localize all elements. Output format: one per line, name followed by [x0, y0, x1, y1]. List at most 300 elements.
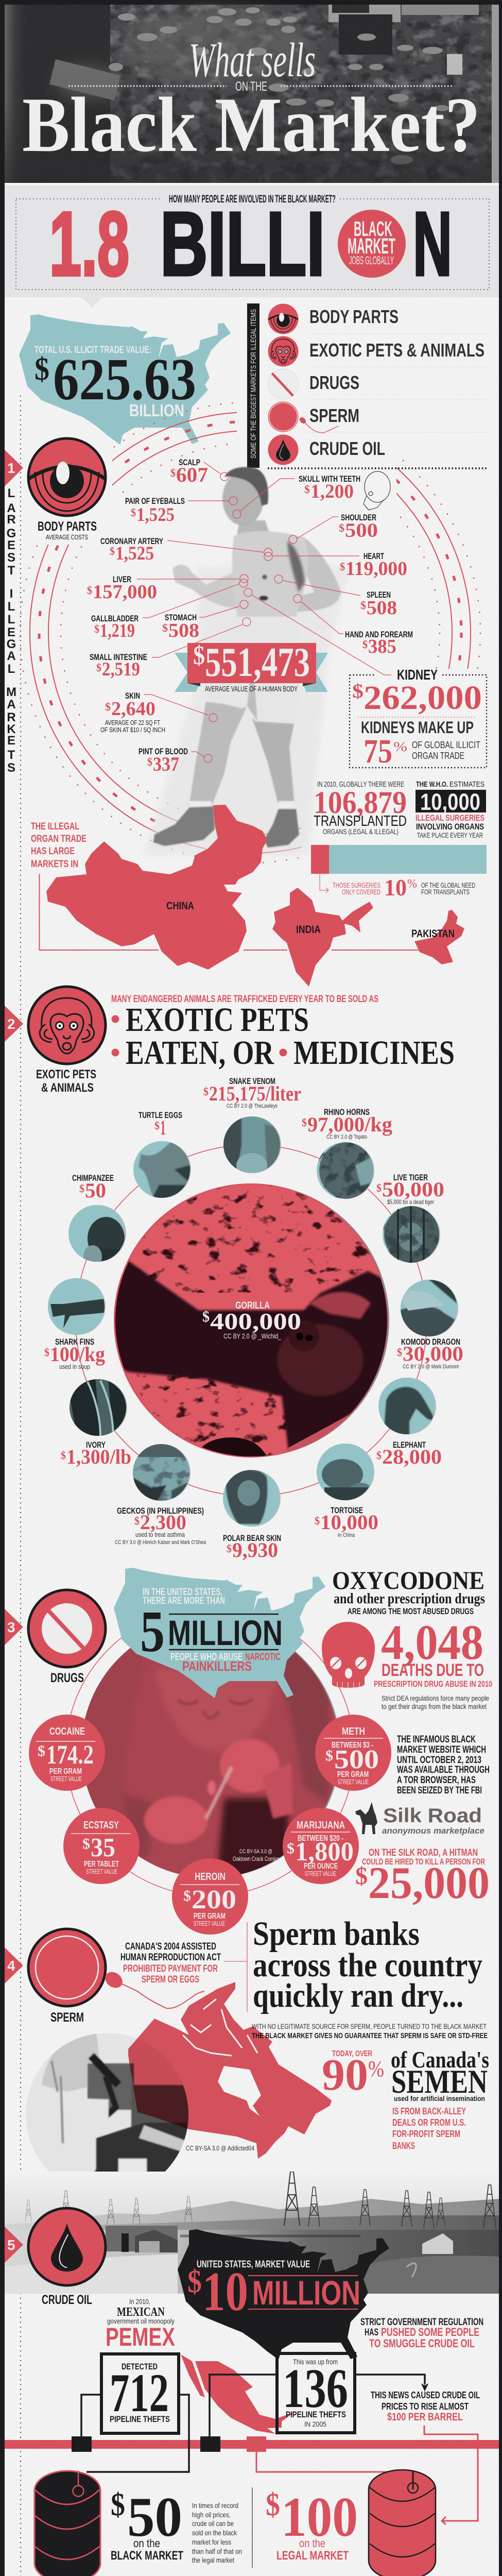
US map: total illicit trade: BILLION: [129, 401, 184, 420]
drug price circle: ecstasy: $: [82, 1836, 90, 1852]
section 5 tag: 5: [7, 2237, 15, 2253]
label: drugs: DRUGS: [309, 372, 359, 393]
drug price circle: meth: $: [325, 1748, 333, 1764]
label: live tiger: [376, 1173, 444, 1206]
red circle callout: MARKET: [348, 234, 395, 259]
price: scalp: 607: [176, 463, 208, 486]
section 3 tag: 3: [7, 1619, 15, 1635]
price: shoulder: [339, 513, 378, 541]
icon: camel: [355, 1802, 377, 1834]
box: 136 pipeline thefts: PIPELINE THEFTS: [286, 2410, 346, 2419]
section 2 tag: 2: [7, 1016, 15, 1032]
photo circle: gorilla: $: [202, 1308, 210, 1325]
price: pair of eyeballs: $: [131, 506, 136, 519]
stat: ten percent: ONLY COVERED: [342, 888, 380, 896]
label: tortoise: 10,000: [320, 1511, 378, 1534]
label: snake venom: 215,175/liter: [209, 1082, 301, 1105]
red circle callout: [338, 210, 406, 278]
label: rhino horns: CC BY 2.0 @ Topato: [326, 1134, 367, 1140]
label: live tiger: $5,000 for a dead tiger: [387, 1198, 434, 1206]
label: sperm: SPERM: [309, 405, 359, 426]
concentric arcs around the body: [20, 402, 480, 863]
text block: price rise: PRICES TO RISE ALMOST: [382, 2401, 469, 2412]
drug price circle: meth: BETWEEN $3 -: [332, 1741, 373, 1750]
price: stomach: [162, 613, 199, 641]
price: scalp: SCALP: [179, 457, 200, 467]
label: live tiger: 50,000: [382, 1178, 444, 1201]
price: skin: $: [105, 700, 111, 713]
price: liver: [87, 574, 157, 603]
price: shoulder: $: [339, 521, 344, 534]
number 1.8: 1.8: [49, 194, 129, 295]
stat: 90 percent of Canada's semen: FOR-PROFIT SPERM: [392, 2129, 460, 2139]
label: turtle eggs: [139, 1110, 182, 1139]
photo circle: elephant: [378, 1378, 437, 1437]
caption: microscope credit: CC BY-SA 3.0 @ Addicted04: [186, 2144, 254, 2152]
text block: Pemex: [106, 2297, 175, 2351]
box: 712 pipeline thefts: PIPELINE THEFTS: [110, 2414, 170, 2424]
text block: Canada's act: HUMAN REPRODUCTION ACT: [120, 1952, 221, 1963]
price: pair of eyeballs: 1,525: [136, 504, 175, 526]
price: coronary artery: CORONARY ARTERY: [100, 536, 163, 546]
stat: illegal surgeries: INVOLVING ORGANS: [416, 822, 484, 832]
vertical label bar: [247, 303, 259, 468]
price: pair of eyeballs: [125, 496, 185, 526]
stat: transplanted organs: TRANSPLANTED: [314, 813, 407, 829]
banner: average value of a human body: AVERAGE VALUE OF A HUMAN BODY: [205, 685, 298, 693]
heading: endangered animals: MEDICINES: [293, 1034, 455, 1072]
bar chart: share of global need: [311, 845, 487, 893]
label: geckos: 2,300: [140, 1511, 186, 1534]
drug price circle: ecstasy: STREET VALUE: [86, 1868, 117, 1875]
price: small intestine: 2,519: [102, 659, 140, 680]
price: 100 on the legal market: [266, 2486, 358, 2563]
price: spleen: [360, 590, 397, 619]
price: 100 on the legal market: $: [266, 2487, 280, 2522]
price: pint of blood: [139, 747, 188, 775]
price: liver: LIVER: [113, 574, 131, 584]
divider lines: sperm banks: [224, 1922, 247, 2012]
stat: 4,048 deaths: [374, 1615, 492, 1710]
photo circle: shark: [48, 1278, 106, 1335]
text block: Canada's act: PROHIBITED PAYMENT FOR: [123, 1963, 218, 1974]
label: komodo dragon: $: [397, 1346, 402, 1359]
barrel: black market: [34, 2471, 100, 2576]
label: geckos: $: [134, 1514, 140, 1527]
drug price circle: cocaine: $: [38, 1743, 45, 1759]
stat: 90 percent of Canada's semen: BANKS: [392, 2141, 415, 2151]
label: komodo dragon: CC BY 2.0 @ Mark Dumont: [403, 1364, 459, 1370]
label: ivory: $: [61, 1449, 66, 1462]
stat: 4,048 deaths: 4,048: [381, 1615, 483, 1670]
drug price circle: marijuana: 1,800: [295, 1837, 354, 1867]
drug price circle: cocaine: COCAINE: [49, 1726, 85, 1737]
price: pint of blood: PINT OF BLOOD: [139, 747, 188, 756]
US map: market value 10 million: [178, 2229, 389, 2360]
price: heart: 119,000: [345, 558, 407, 580]
heading: exotic pets and animals: [36, 1067, 96, 1095]
box: 712 pipeline thefts: [101, 2354, 179, 2433]
US map: 5 million painkiller abusers: 5: [140, 1599, 165, 1664]
label: polar bear skin: 9,930: [232, 1538, 278, 1562]
label: shark fins: used in soup: [59, 1363, 90, 1370]
text block: Pemex: government oil monopoly: [107, 2317, 175, 2325]
label: shark fins: 100/kg: [50, 1343, 105, 1366]
label: rhino horns: 97,000/kg: [307, 1113, 392, 1136]
box: 136 pipeline thefts: [277, 2353, 355, 2433]
callout: kidney: [350, 667, 487, 770]
label: turtle eggs: 1: [160, 1116, 166, 1139]
price: 50 on the black market: 50: [127, 2486, 182, 2548]
photo circle: chimpanzee: [68, 1205, 126, 1262]
heading: exotic pets and animals: EXOTIC PETS: [36, 1067, 96, 1081]
red circle callout: BLACK: [354, 217, 392, 241]
US map: total illicit trade: TOTAL U.S. ILLICIT TRADE VALUE:: [34, 345, 151, 355]
stat: illegal surgeries: THE W.H.O.: [416, 780, 448, 789]
price: 50 on the black market: $: [111, 2487, 125, 2522]
stat: transplanted organs: ORGANS (LEGAL & ILLEGAL): [323, 827, 399, 836]
photo circle: komodo dragon: [401, 1280, 458, 1336]
banner: average value of a human body: $: [193, 641, 205, 670]
price: gallbladder: 1,219: [100, 620, 135, 641]
label: rhino horns: $: [302, 1116, 307, 1129]
photo: oil field: [5, 2172, 499, 2294]
callout: kidney: $: [352, 681, 363, 702]
price: coronary artery: [100, 536, 163, 564]
icon: eye: [268, 304, 299, 334]
price: small intestine: $: [96, 661, 101, 674]
label: komodo dragon: KOMODO DRAGON: [401, 1337, 460, 1347]
price: heart: [340, 551, 407, 580]
photo circle: gecko: [133, 1444, 191, 1501]
label: geckos: [115, 1506, 206, 1546]
label: live tiger: LIVE TIGER: [393, 1173, 428, 1182]
text: illegal organ trade markets: [31, 821, 86, 870]
heading: drugs: DRUGS: [50, 1671, 84, 1685]
drug price circle: cocaine: 174.2: [46, 1740, 94, 1770]
drug price circle: heroin: [172, 1858, 248, 1935]
price: skin: [100, 691, 165, 734]
human figure photo: [144, 467, 350, 855]
drug price circle: ecstasy: PER TABLET: [84, 1860, 119, 1869]
price: liver: 157,000: [93, 581, 157, 603]
stat: ten percent: 10: [384, 874, 407, 901]
section 1 tag: [5, 450, 23, 486]
price: skin: AVERAGE OF 22 SQ FT: [105, 719, 160, 726]
drug price circle: ecstasy: ECSTASY: [83, 1820, 119, 1831]
title: [22, 33, 480, 168]
price: hand and forearm: [345, 630, 413, 657]
barrel: legal market: [369, 2470, 436, 2576]
callout: kidney: %: [393, 739, 407, 754]
drug price circle: heroin: 200: [192, 1885, 236, 1914]
text block: strict regulation: [360, 2317, 483, 2350]
box: 712 pipeline thefts: 712: [110, 2363, 169, 2423]
text block: infamous website: [397, 1734, 490, 1796]
label: komodo dragon: 30,000: [403, 1342, 463, 1365]
photo circle: ivory: [70, 1379, 127, 1436]
price: hand and forearm: 385: [368, 636, 396, 657]
label: chimpanzee: CHIMPANZEE: [72, 1173, 114, 1183]
label: geckos: GECKOS (IN PHILLIPPINES): [117, 1506, 204, 1516]
section 5 tag: [5, 2227, 23, 2263]
photo circle: snake venom: [223, 1116, 281, 1173]
drug price circle: heroin: $: [183, 1888, 191, 1904]
price: pint of blood: $: [147, 755, 152, 768]
label: polar bear skin: POLAR BEAR SKIN: [223, 1533, 281, 1543]
label: snake venom: [203, 1076, 301, 1109]
map: Mexico: [181, 2354, 295, 2434]
drug price circle: marijuana: MARIJUANA: [297, 1820, 345, 1831]
price: stomach: STOMACH: [165, 613, 197, 622]
price: stomach: 508: [168, 620, 199, 641]
icon: skull outline: [363, 471, 390, 510]
big icon: body parts eye: [28, 438, 106, 516]
label: polar bear skin: $: [227, 1542, 232, 1555]
label: geckos: CC BY 3.0 @ Hinrich Kaiser and Mark O'Shea: [115, 1539, 206, 1546]
big icon: sperm: [28, 1929, 204, 2008]
photo circle: turtle: [133, 1141, 193, 1200]
text block: oxycodone: [332, 1566, 485, 1616]
label: komodo dragon: [397, 1337, 463, 1370]
drug price circle: ecstasy: [63, 1808, 140, 1884]
price: shoulder: 500: [345, 519, 378, 541]
headline: sperm banks: quickly ran dry...: [253, 1977, 463, 2014]
price: heart: HEART: [363, 551, 384, 561]
photo circle: tortoise: [317, 1444, 374, 1503]
label: snake venom: $: [203, 1085, 209, 1098]
photo circle: scientist at microscope: [26, 2032, 193, 2197]
photo circle: person smoking: Oaktown Crack Comics: [233, 1855, 280, 1862]
stat: transplanted organs: [314, 780, 407, 836]
label: live tiger: $: [376, 1181, 382, 1194]
price: skull with teeth: $: [304, 483, 310, 496]
title rule left: [68, 86, 227, 87]
callout: kidney: 75: [363, 733, 392, 770]
headline: sperm banks: [252, 1915, 488, 2040]
label: turtle eggs: $: [154, 1119, 160, 1132]
sub heading: average costs: AVERAGE COSTS: [46, 533, 88, 541]
map: Pakistan: PAKISTAN: [411, 928, 455, 940]
label: rhino horns: RHINO HORNS: [324, 1107, 370, 1117]
stat: 90 percent of Canada's semen: TODAY, OVER: [332, 2049, 372, 2058]
price: 100 on the legal market: on the: [299, 2537, 325, 2550]
drug price circle: heroin: HEROIN: [195, 1871, 226, 1883]
label: shark fins: [44, 1337, 105, 1370]
label: ivory: 1,300/lb: [66, 1445, 131, 1468]
price: 100 on the legal market: LEGAL MARKET: [276, 2549, 349, 2563]
letter N: N: [413, 194, 452, 295]
text: illegal organ trade markets: ORGAN TRADE: [31, 834, 86, 844]
label: geckos: used to treat asthma: [135, 1531, 185, 1538]
vertical dotted spine: [21, 396, 487, 2576]
US map: 5 million painkiller abusers: PAINKILLERS: [182, 1658, 252, 1674]
price: heart: $: [340, 560, 345, 573]
map: China: CHINA: [166, 900, 194, 912]
photo circle: person smoking: [81, 1618, 340, 1880]
drug price circle: ecstasy: 35: [91, 1833, 115, 1862]
text block: Canada's act: CANADA'S 2004 ASSISTED: [125, 1941, 216, 1952]
text block: record high oil prices: market for less: [192, 2538, 231, 2546]
US map: 5 million painkiller abusers: NARCOTIC: [245, 1652, 281, 1663]
section 2 tag: [5, 1006, 23, 1042]
map: Canada: [128, 1982, 332, 2159]
text block: Pemex: In 2010,: [129, 2297, 150, 2306]
photo circle: gorilla: 400,000: [210, 1308, 301, 1334]
price: gallbladder: $: [94, 622, 99, 635]
price: 50 on the black market: BLACK MARKET: [111, 2549, 183, 2563]
box: 136 pipeline thefts: IN 2005: [304, 2420, 326, 2428]
drug price circle: cocaine: STREET VALUE: [50, 1775, 82, 1783]
divider between markets: [252, 2487, 253, 2568]
text block: Pemex: MEXICAN: [117, 2306, 165, 2319]
drug price circle: heroin: STREET VALUE: [194, 1920, 225, 1927]
big icon: oil drop: [28, 2208, 106, 2285]
drug price circle: meth: PER GRAM: [337, 1770, 369, 1779]
heading: endangered animals: [111, 994, 455, 1072]
text block: record high oil prices: sold on the black: [192, 2529, 237, 2537]
icon: oil drop: [268, 435, 299, 465]
drug price circle: meth: [315, 1715, 391, 1791]
label: body parts: BODY PARTS: [309, 306, 399, 327]
section 4 tag: 4: [7, 1958, 15, 1974]
stat: ten percent: OF THE GLOBAL NEED: [421, 881, 475, 889]
text block: strict regulation: HAS: [365, 2327, 378, 2338]
price: liver: $: [87, 584, 92, 597]
stat: hitman price: 25,000: [368, 1858, 490, 1908]
US map: market value 10 million: $: [187, 2264, 202, 2299]
stat: hitman price: $: [355, 1862, 368, 1890]
stat: 90 percent of Canada's semen: %: [368, 2056, 384, 2081]
price: 50 on the black market: on the: [133, 2537, 160, 2550]
price: spleen: 508: [367, 597, 397, 619]
label: snake venom: SNAKE VENOM: [229, 1076, 275, 1086]
stat: illegal surgeries: ESTIMATES: [449, 780, 484, 789]
stat: 90 percent of Canada's semen: IS FROM BACK-ALLEY: [392, 2106, 466, 2116]
price: skull with teeth: 1,200: [310, 481, 354, 502]
price: pair of eyeballs: PAIR OF EYEBALLS: [125, 496, 185, 506]
heading: endangered animals: EATEN, OR: [126, 1034, 274, 1072]
big icon: no drugs: [28, 1590, 106, 1667]
photo circle: gorilla: GORILLA: [235, 1300, 270, 1311]
label: snake venom: CC BY 2.0 @ TheLawleys: [227, 1103, 278, 1109]
text block: record high oil prices: In times of record: [192, 2501, 238, 2510]
photo circle: gorilla: CC BY 2.0 @ _Wichid_: [223, 1332, 281, 1340]
map: China: [46, 805, 267, 970]
label: tortoise: TORTOISE: [331, 1505, 363, 1515]
text: illegal organ trade markets: HAS LARGE: [31, 846, 75, 857]
price: small intestine: [90, 652, 147, 680]
price: hand and forearm: $: [362, 638, 368, 651]
banner: average value of a human body: 551,473: [205, 640, 310, 685]
heading: endangered animals: MANY ENDANGERED ANIMALS ARE TRAFFICKED EVERY YEAR TO BE SOLD AS: [111, 994, 378, 1005]
label: polar bear skin: [223, 1533, 281, 1562]
stat: ten percent: FOR TRANSPLANTS: [421, 888, 470, 896]
stat: transplanted organs: 106,879: [314, 786, 407, 820]
label: shark fins: $: [44, 1346, 49, 1359]
section 3 tag: [5, 1609, 23, 1645]
text block: price rise: [371, 2390, 480, 2423]
price: skull with teeth: SKULL WITH TEETH: [299, 474, 360, 484]
price: scalp: [170, 457, 208, 486]
US map: total illicit trade: $: [34, 352, 49, 387]
pipeline: [5, 2375, 499, 2524]
icon: sperm: [268, 402, 339, 433]
price: skin: 2,640: [111, 698, 155, 720]
stat: transplanted organs: IN 2010, GLOBALLY THERE WERE: [317, 780, 404, 789]
map: Pakistan: [411, 910, 464, 964]
label: ivory: IVORY: [86, 1440, 106, 1450]
drug price circle: marijuana: BETWEEN $20 -: [298, 1834, 343, 1843]
price: spleen: $: [360, 599, 366, 612]
price: scalp: $: [170, 466, 176, 479]
text block: record high oil prices: high oil prices,: [192, 2511, 231, 2519]
map: India: INDIA: [296, 924, 321, 936]
label: tortoise: In China: [338, 1532, 355, 1538]
icon: monkey: [268, 336, 299, 367]
stat: ten percent: [333, 874, 475, 901]
price: 100 on the legal market: 100: [281, 2486, 358, 2548]
map: India: [272, 888, 373, 987]
stat: ten percent: THOSE SURGERIES: [333, 881, 380, 889]
price: stomach: $: [162, 621, 168, 634]
big icon: monkey: [28, 987, 106, 1064]
price: hand and forearm: HAND AND FOREARM: [345, 630, 413, 639]
drug price circle: marijuana: STREET VALUE: [305, 1870, 336, 1877]
price: coronary artery: $: [110, 545, 115, 557]
text: illegal organ trade markets: THE ILLEGAL: [31, 821, 79, 832]
word billion: BILLI: [160, 194, 325, 295]
connecting ring: [76, 1145, 427, 1496]
title line: what sells: What sells: [189, 33, 316, 87]
body part leader lines and targets: [137, 462, 391, 762]
icon: skull with pills: [322, 1622, 375, 1689]
price: skull with teeth: [299, 474, 360, 502]
callout: kidney: 262,000: [363, 679, 482, 717]
drug price circle: marijuana: PER OUNCE: [304, 1862, 338, 1871]
heading: body parts: BODY PARTS: [38, 519, 97, 534]
price: skin: SKIN: [125, 691, 140, 701]
label: elephant: ELEPHANT: [393, 1440, 426, 1450]
label: chimpanzee: [72, 1173, 114, 1202]
label: turtle eggs: TURTLE EGGS: [139, 1110, 182, 1120]
text block: record high oil prices: than half of that on: [192, 2547, 242, 2555]
box: 712 pipeline thefts: DETECTED: [122, 2362, 158, 2371]
heading: sperm: SPERM: [50, 2010, 84, 2025]
photo circle: polar bear skin: [223, 1470, 281, 1527]
text block: price rise: $100 PER BARREL: [387, 2411, 463, 2423]
price: 50 on the black market: [111, 2486, 183, 2563]
logo: silk road: Silk Road: [383, 1805, 482, 1827]
US map: total illicit trade: [19, 314, 231, 445]
US map: 5 million painkiller abusers: THERE ARE MORE THAN: [143, 1596, 225, 1606]
stat: ten percent: %: [407, 877, 417, 891]
photo circle: rhino horn: [317, 1142, 374, 1199]
title rule right: [281, 86, 452, 87]
US map: market value 10 million: 10: [202, 2261, 248, 2323]
price: shoulder: SHOULDER: [341, 513, 376, 522]
callout: kidney: KIDNEY: [397, 667, 438, 683]
stat: 90 percent of Canada's semen: DEALS OR FROM U.S.: [392, 2117, 466, 2128]
logo: silk road: anonymous marketplace: [382, 1826, 484, 1836]
US map: 5 million painkiller abusers: MILLION: [168, 1613, 283, 1653]
section 4 tag: [5, 1947, 23, 1984]
text block: Canada's act: SPERM OR EGGS: [142, 1974, 199, 1985]
price: gallbladder: [91, 614, 139, 641]
label: elephant: $: [376, 1449, 382, 1462]
photo circle: person smoking: CC BY-SA 3.0 @: [239, 1849, 272, 1855]
label: rhino horns: [302, 1107, 392, 1140]
